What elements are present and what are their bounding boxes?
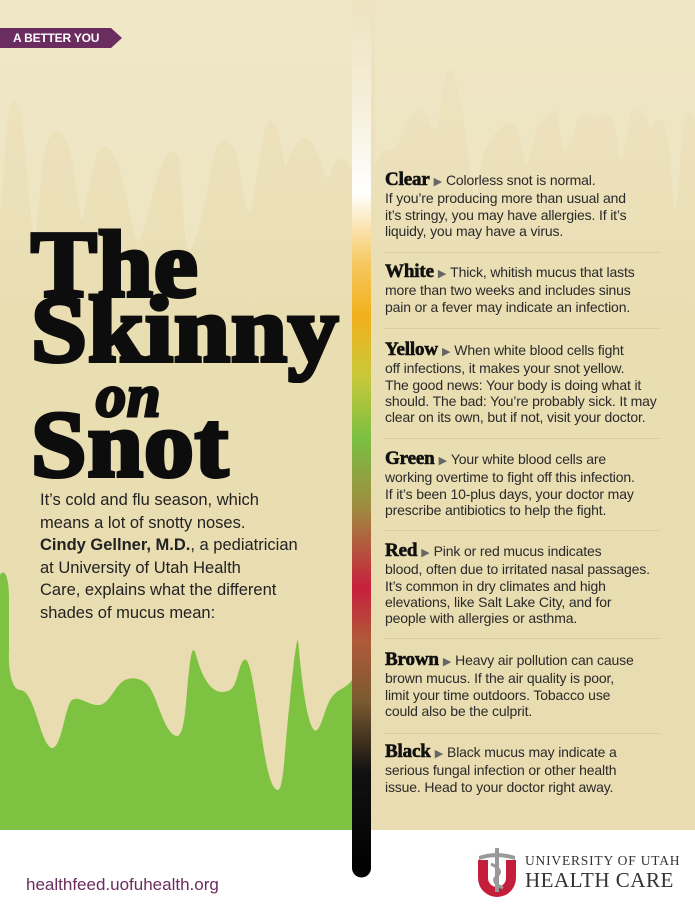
black [385,741,617,795]
title [30,213,340,497]
white: more than two weeks and includes sinus [385,282,631,298]
logo: HEALTH CARE [525,868,674,892]
yellow: off infections, it makes your snot yellow. [385,360,624,376]
intro text: Care, explains what the different [40,581,276,599]
red [385,540,650,626]
black: Black ▶ Black mucus may indicate a [385,741,617,762]
brown: limit your time outdoors. Tobacco use [385,687,610,703]
red: elevations, like Salt Lake City, and for [385,594,611,610]
footer [0,830,695,917]
logo [478,848,680,897]
green [385,448,635,518]
intro text: at University of Utah Health [40,558,241,576]
intro text: shades of mucus mean: [40,604,215,622]
red: It’s common in dry climates and high [385,578,606,594]
color bar [352,0,371,878]
clear: it’s stringy, you may have allergies. If it’s [385,207,626,223]
title: Skinny [31,278,339,382]
yellow: clear on its own, but if not, visit your doctor. [385,409,645,425]
green: working overtime to fight off this infection. [385,469,635,485]
brown: brown mucus. If the air quality is poor, [385,670,614,686]
intro text: It’s cold and flu season, which [40,491,259,509]
green: Green ▶ Your white blood cells are [385,448,606,469]
red: people with allergies or asthma. [385,610,577,626]
black: issue. Head to your doctor right away. [385,779,613,795]
white [384,261,635,315]
clear: If you’re producing more than usual and [385,190,626,206]
brown [385,649,634,719]
intro text [40,491,298,622]
green: prescribe antibiotics to help the fight. [385,502,606,518]
intro text: means a lot of snotty noses. [40,514,245,532]
section tag [0,28,122,48]
logo: UNIVERSITY OF UTAH [525,853,680,868]
yellow: should. The bad: You’re probably sick. It may [385,393,657,409]
title: The [31,213,199,317]
white: pain or a fever may indicate an infection. [385,299,630,315]
red: blood, often due to irritated nasal passages. [385,561,650,577]
yellow: The good news: Your body is doing what it [385,377,641,393]
yellow: Yellow ▶ When white blood cells fight [385,339,624,360]
green: If it’s been 10-plus days, your doctor may [385,486,634,502]
title: on [96,363,161,429]
red: Red ▶ Pink or red mucus indicates [385,540,602,561]
clear [385,169,626,239]
clear: liquidy, you may have a virus. [385,223,563,239]
black: serious fungal infection or other health [385,762,616,778]
green area [0,630,352,830]
brown: could also be the culprit. [385,703,532,719]
intro text: Cindy Gellner, M.D., a pediatrician [40,536,298,554]
clear: Clear ▶ Colorless snot is normal. [385,169,595,190]
yellow [385,339,657,425]
brown: Brown ▶ Heavy air pollution can cause [385,649,634,670]
section tag: A BETTER YOU [13,31,99,45]
footer url: healthfeed.uofuhealth.org [26,875,219,894]
white: White ▶ Thick, whitish mucus that lasts [385,261,635,282]
title: Snot [31,393,229,497]
